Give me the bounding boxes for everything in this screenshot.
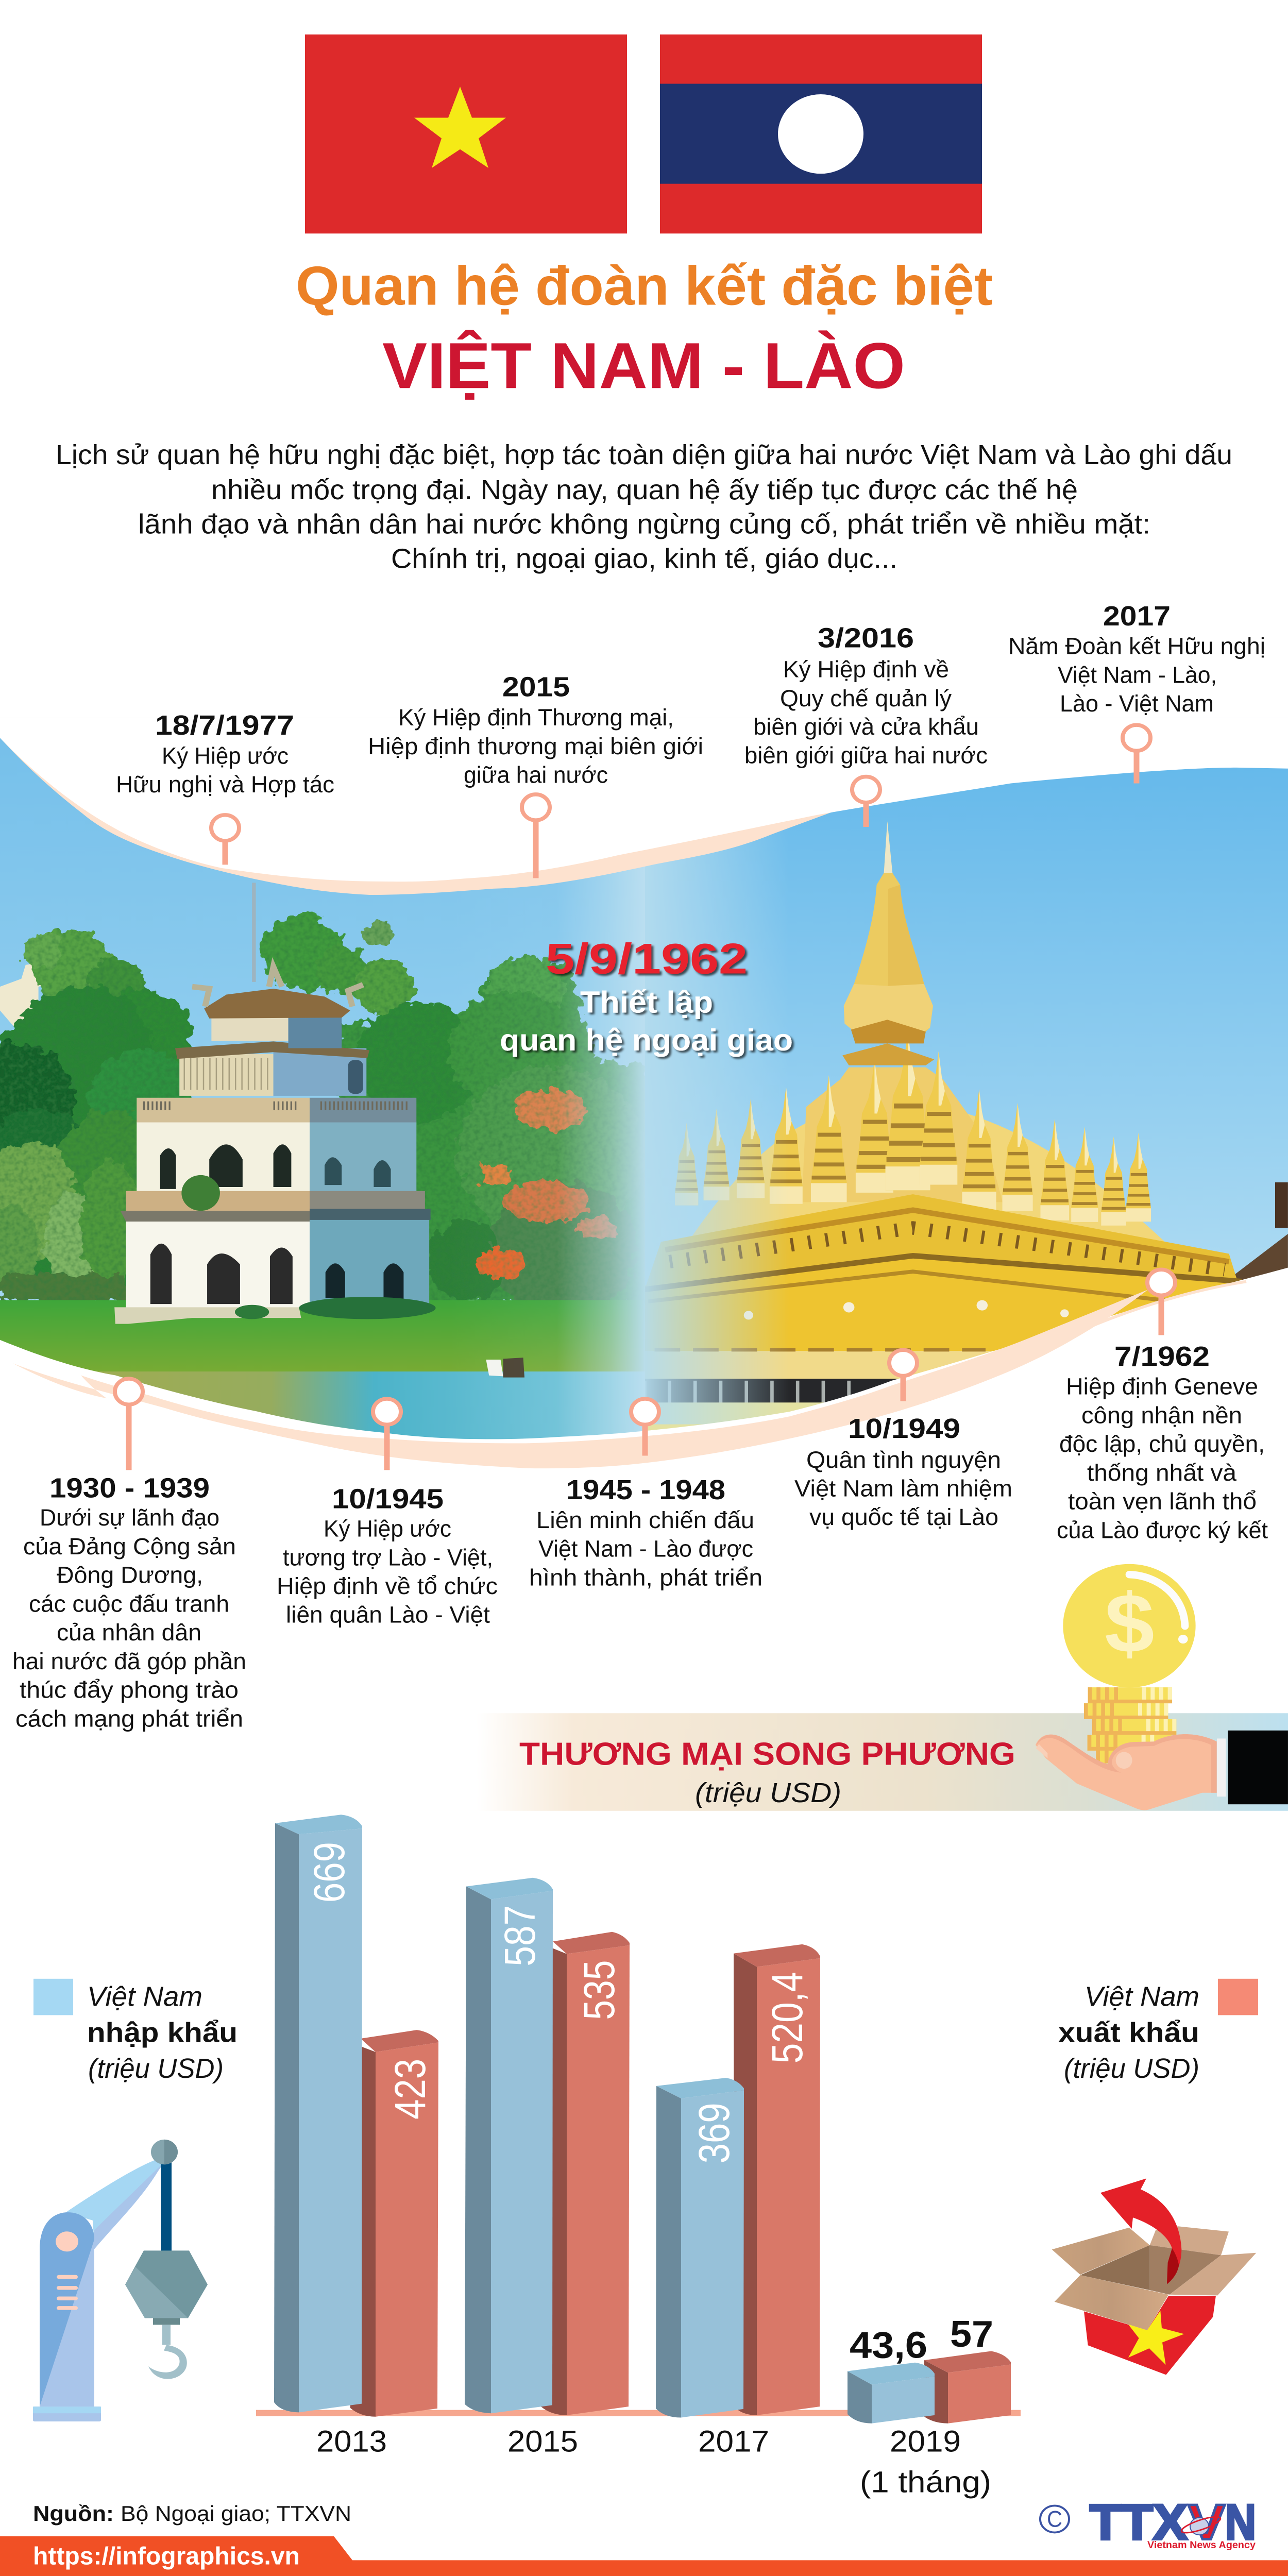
event: 7/1962: toàn vẹn lãnh thổ	[1068, 1488, 1257, 1515]
lawn	[0, 1300, 645, 1374]
event: 18/7/1977: 18/7/1977	[155, 709, 294, 740]
central date callout	[500, 935, 793, 1057]
logo: TTXVN: C	[1047, 2506, 1062, 2532]
event: 2017: Năm Đoàn kết Hữu nghị	[1008, 633, 1265, 659]
event: 18/7/1977: Hữu nghị và Hợp tác	[116, 772, 334, 798]
event: 2015: 2015	[502, 671, 570, 702]
bar: 2013 export 423: 423	[386, 2059, 435, 2120]
right trees	[263, 916, 649, 1316]
event: 10/1949: Việt Nam làm nhiệm	[794, 1476, 1012, 1502]
event: 1930 - 1939: 1930 - 1939	[49, 1472, 210, 1503]
back flaps	[1052, 2226, 1229, 2275]
event: 3/2016: Quy chế quản lý	[780, 686, 952, 712]
year labels: 2019	[890, 2425, 961, 2458]
top white curve	[0, 718, 1288, 882]
water	[0, 1371, 645, 1475]
event: 1945 - 1948: 1945 - 1948	[566, 1474, 725, 1505]
intro text	[56, 439, 1232, 574]
far left building	[0, 964, 41, 1027]
event: 1945 - 1948: Liên minh chiến đấu	[536, 1507, 754, 1533]
title	[296, 255, 993, 402]
intro text: lãnh đạo và nhân dân hai nước không ngừng củng cố, phát triển về nhiều mặt:	[138, 509, 1150, 539]
bottom swoosh: beige	[13, 1281, 1246, 1468]
arrow	[1100, 2178, 1181, 2284]
event: 2015: Hiệp định thương mại biên giới	[368, 733, 703, 759]
event: 1930 - 1939: hai nước đã góp phần	[12, 1648, 246, 1674]
legend: Vietnam exports: (triệu USD)	[1064, 2053, 1199, 2084]
source: Nguồn:	[33, 2502, 114, 2526]
flag: Laos	[660, 35, 982, 233]
event: 18/7/1977	[116, 709, 334, 865]
logo: TTXVN: V	[1188, 2495, 1225, 2550]
coin	[1063, 1564, 1196, 1687]
coin: $	[1105, 1577, 1155, 1670]
event: 10/1945: liên quân Lào - Việt	[286, 1602, 490, 1628]
event: 3/2016: 3/2016	[818, 622, 914, 653]
legend: Vietnam imports: Việt Nam	[87, 1981, 202, 2012]
flag: Vietnam	[305, 35, 627, 233]
heading: bilateral trade	[519, 1736, 1015, 1808]
event: 1930 - 1939: thúc đẩy phong trào	[20, 1677, 239, 1703]
bar: 2015 export 535: 535	[575, 1960, 624, 2020]
intro text: nhiều mốc trọng đại. Ngày nay, quan hệ ấy tiếp tục được các thế hệ	[211, 474, 1078, 505]
event: 7/1962: của Lào được ký kết	[1057, 1517, 1268, 1544]
fade	[448, 733, 646, 1486]
legend: Vietnam exports: Việt Nam	[1084, 1981, 1199, 2012]
year labels: 2015	[507, 2425, 578, 2458]
event: 3/2016: biên giới giữa hai nước	[744, 742, 988, 769]
event: 1930 - 1939: cách mạng phát triển	[15, 1706, 243, 1732]
main spire	[844, 821, 933, 1040]
front flaps	[1055, 2253, 1256, 2330]
star	[1128, 2311, 1184, 2365]
event: 2017: Lào - Việt Nam	[1060, 691, 1214, 717]
event: 7/1962: Hiệp định Geneve	[1066, 1374, 1258, 1400]
event: 7/1962: 7/1962	[1114, 1341, 1210, 1371]
event: 1930 - 1939: của Đảng Cộng sản	[23, 1533, 236, 1560]
title: Quan hệ đoàn kết đặc biệt	[296, 255, 993, 317]
legend: Vietnam exports	[1058, 1979, 1258, 2084]
bar: 2013 export 423	[340, 2030, 438, 2417]
event: 1930 - 1939: của nhân dân	[57, 1620, 201, 1646]
event: 1930 - 1939: Đông Dương,	[57, 1562, 203, 1588]
event: 1930 - 1939: các cuộc đấu tranh	[29, 1591, 229, 1617]
box inner	[1080, 2245, 1221, 2295]
event: 10/1945	[277, 1399, 498, 1628]
photo: Hoan Kiem turtle tower (left)	[0, 718, 649, 1486]
central date callout: quan hệ ngoại giao	[500, 1023, 793, 1057]
bottom white curve	[0, 1268, 1288, 1507]
year labels	[316, 2425, 991, 2499]
left trees	[0, 929, 192, 1302]
event: 2015: giữa hai nước	[464, 762, 608, 788]
bar: 2015 import 587	[465, 1878, 553, 2413]
intro text: Chính trị, ngoại giao, kinh tế, giáo dục...	[391, 543, 897, 574]
heading: bilateral trade: THƯƠNG MẠI SONG PHƯƠNG	[519, 1736, 1015, 1772]
lower wall	[645, 1254, 1250, 1464]
event: 1945 - 1948: Việt Nam - Lào được	[538, 1536, 753, 1562]
bar: 2013 import 669	[274, 1815, 362, 2412]
brown roof	[1233, 1234, 1288, 1301]
icon: open box with flag and arrow	[1052, 2178, 1256, 2375]
event: 10/1949: vụ quốc tế tại Lào	[809, 1504, 998, 1531]
legend: Vietnam exports: xuất khẩu	[1058, 2016, 1199, 2048]
event: 2017	[1008, 600, 1265, 784]
intro text: Lịch sử quan hệ hữu nghị đặc biệt, hợp tác toàn diện giữa hai nước Việt Nam và Lào ghi dấu	[56, 439, 1232, 470]
legend: Vietnam imports	[33, 1979, 238, 2084]
event: 10/1945: Hiệp định về tổ chức	[277, 1573, 498, 1600]
event: 7/1962: thống nhất và	[1087, 1460, 1237, 1486]
icon: coin on hand	[1036, 1564, 1288, 1810]
heading: bilateral trade: (triệu USD)	[695, 1777, 841, 1808]
event: 1945 - 1948: hình thành, phát triển	[529, 1565, 762, 1591]
trade banner	[477, 1713, 1288, 1811]
event: 7/1962	[1057, 1269, 1268, 1544]
logo: TTXVN: TTX	[1090, 2495, 1188, 2550]
year labels: 2017	[698, 2425, 769, 2458]
event: 7/1962: công nhận nền	[1081, 1402, 1242, 1429]
hand	[1036, 1731, 1288, 1810]
boat	[486, 1360, 503, 1376]
event: 2017: Việt Nam - Lào,	[1058, 662, 1217, 688]
dome	[691, 1099, 1165, 1242]
photo: That Luang golden stupa (right)	[644, 718, 1288, 1482]
event: 10/1945: 10/1945	[332, 1483, 444, 1514]
event: 2017: 2017	[1103, 600, 1171, 632]
event: 10/1949	[794, 1350, 1012, 1531]
fade	[644, 730, 789, 1425]
event: 2015: Ký Hiệp định Thương mại,	[398, 705, 674, 731]
event: 7/1962: độc lập, chủ quyền,	[1059, 1431, 1265, 1458]
legend: Vietnam imports: (triệu USD)	[88, 2053, 224, 2084]
bar: 2017 import 369	[656, 2078, 744, 2418]
event: 3/2016: biên giới và cửa khẩu	[753, 714, 979, 740]
balustrade	[645, 1194, 1238, 1290]
bar: 2019 import 43,6: 43,6	[850, 2324, 927, 2366]
bar: 2015 export 535	[536, 1932, 630, 2415]
event: 3/2016	[744, 622, 988, 827]
event: 18/7/1977: Ký Hiệp ước	[162, 743, 289, 769]
central date callout: 5/9/1962	[546, 935, 748, 983]
antenna	[252, 883, 256, 982]
event: 10/1949: Quân tình nguyện	[806, 1447, 1001, 1473]
event: 3/2016: Ký Hiệp định về	[783, 656, 949, 683]
source: Bộ Ngoại giao; TTXVN	[121, 2502, 351, 2526]
event: 1945 - 1948	[529, 1399, 762, 1591]
tower	[114, 967, 436, 1324]
bar chart	[256, 1815, 1021, 2499]
bar: 2013 import 669: 669	[306, 1842, 354, 1903]
small spires	[675, 1123, 698, 1206]
bar: 2017 export 520,4: 520,4	[764, 1972, 812, 2063]
bar: 2015 import 587: 587	[496, 1905, 545, 1967]
bar: 2019 import 43,6	[848, 2324, 935, 2424]
legend: Vietnam imports: nhập khẩu	[87, 2016, 238, 2048]
top swoosh: beige	[0, 718, 835, 895]
year labels: (1 tháng)	[860, 2465, 991, 2499]
footer bar	[0, 2536, 1288, 2576]
bar: 2017 export 520,4	[734, 1944, 820, 2415]
event: 1930 - 1939	[12, 1379, 246, 1732]
central date callout: Thiết lập	[580, 986, 713, 1020]
event: 10/1945: tương trợ Lào - Việt,	[283, 1545, 493, 1571]
event: 1930 - 1939: Dưới sự lãnh đạo	[40, 1505, 219, 1531]
bar: 2019 export 57	[922, 2313, 1011, 2424]
coin stack	[1084, 1687, 1176, 1764]
event: 10/1945: Ký Hiệp ước	[324, 1516, 451, 1542]
logo: TTXVN: Vietnam News Agency	[1147, 2540, 1256, 2551]
bar: 2017 import 369: 369	[690, 2103, 739, 2163]
logo: TTXVN: N	[1225, 2495, 1256, 2550]
logo: TTXVN	[1040, 2495, 1256, 2551]
title: VIỆT NAM - LÀO	[382, 329, 905, 402]
box body	[1084, 2296, 1216, 2375]
year labels: 2013	[316, 2425, 387, 2458]
footer bar: https://infographics.vn	[33, 2542, 300, 2570]
event: 10/1949: 10/1949	[848, 1413, 960, 1444]
event: 2015	[368, 671, 703, 878]
bar: 2019 export 57: 57	[950, 2313, 993, 2354]
central tier	[802, 1067, 1003, 1202]
icon: crane	[33, 2140, 208, 2421]
